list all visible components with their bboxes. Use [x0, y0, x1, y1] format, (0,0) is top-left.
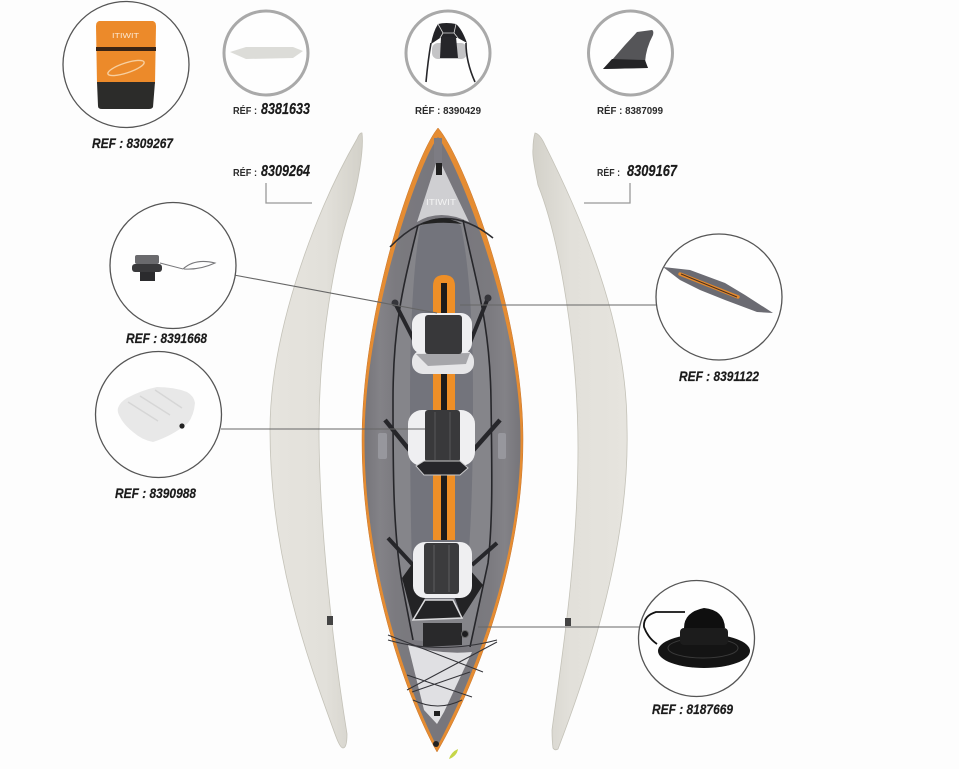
cushion body — [118, 387, 195, 442]
left side tube — [270, 133, 362, 748]
label: right tube — [597, 163, 678, 180]
valve flange — [132, 264, 162, 272]
hull outer rim — [362, 128, 523, 752]
label: fin: RÉF : 8387099 — [597, 104, 663, 117]
label: left tube: RÉF : — [233, 166, 257, 179]
part: cushion — [96, 352, 222, 478]
leader: inflation valve — [234, 275, 437, 313]
seat 2 straps — [385, 420, 500, 463]
fin ring — [588, 11, 672, 95]
cockpit inner band — [393, 219, 492, 647]
valve ring — [110, 202, 236, 328]
rear valve — [462, 630, 468, 638]
seat 2 pad — [425, 410, 460, 462]
backpack mesh pocket — [97, 82, 155, 109]
black centre strip — [441, 283, 447, 540]
label: left tube — [233, 163, 310, 180]
drain cap base — [680, 628, 728, 645]
part: inflation valve — [110, 202, 236, 328]
part: kayak skin — [224, 11, 308, 95]
part: backpack — [63, 2, 189, 128]
leader: floor — [460, 304, 656, 306]
backpack orange body — [96, 21, 156, 84]
right side tube — [533, 133, 627, 750]
label: right tube: RÉF : — [597, 166, 620, 179]
part: floor — [656, 234, 782, 360]
seat back — [431, 23, 467, 44]
seat 3 — [388, 538, 497, 647]
bungee cords — [388, 635, 497, 706]
leader: drain valve — [478, 626, 640, 628]
left seam — [393, 225, 418, 640]
bow tab — [436, 163, 442, 175]
bow strap — [434, 138, 442, 164]
cushion ribs — [128, 390, 182, 421]
skin ring — [224, 11, 308, 95]
rear footwell — [423, 623, 462, 647]
part: seat — [406, 11, 490, 95]
orange floor strip — [433, 275, 455, 540]
label: seat: RÉF : 8390429 — [415, 104, 481, 117]
cockpit rim hump — [420, 218, 462, 225]
bracket: left tube — [266, 183, 312, 203]
seat 2 handles — [378, 433, 506, 459]
drain flange highlight — [668, 638, 738, 658]
seat ring — [406, 11, 490, 95]
seat 2 — [378, 410, 506, 475]
hull body — [364, 137, 520, 747]
cushion ring — [96, 352, 222, 478]
cushion valve — [179, 423, 185, 429]
seat 3 base — [413, 600, 462, 620]
seat 1 — [392, 294, 492, 374]
kayak — [362, 128, 523, 752]
seat back seams — [438, 24, 458, 38]
label: floor: REF : 8391122 — [679, 368, 759, 384]
label: drain valve: REF : 8187669 — [652, 701, 733, 717]
seat 1 pad — [425, 315, 462, 354]
seat 3 pad — [424, 543, 459, 594]
seat 1 base inner — [416, 353, 470, 366]
seat straps — [426, 43, 475, 82]
backpack strap — [96, 47, 156, 51]
floor orange strip — [680, 274, 738, 297]
seat 1 straps — [395, 298, 488, 355]
leader: cushion — [221, 428, 425, 430]
backpack ring — [63, 2, 189, 128]
seat 1 clips — [392, 294, 492, 306]
label: left tube: 8309264 — [261, 163, 310, 180]
seat 1 base — [412, 350, 474, 374]
skin shape — [230, 47, 303, 59]
bracket: right tube — [584, 183, 630, 203]
brand on deck: ITIWIT — [426, 198, 456, 207]
floor dark centre — [681, 274, 737, 297]
label: cushion: REF : 8390988 — [115, 485, 196, 501]
label: skin: 8381633 — [261, 101, 310, 118]
seat 3 side panels — [402, 560, 483, 620]
seat 1 back — [412, 313, 472, 354]
seat pad — [440, 37, 458, 58]
part: fin — [588, 11, 672, 95]
backpack brand: ITIWIT — [112, 33, 140, 40]
fin blade — [603, 30, 653, 69]
stern ring — [433, 741, 439, 747]
stern deck panel — [408, 645, 472, 724]
tube fittings — [327, 616, 571, 626]
drain cap top — [684, 608, 725, 628]
cockpit arch — [390, 219, 493, 247]
seat 2 base — [416, 461, 468, 475]
label: right tube: 8309167 — [627, 163, 678, 180]
valve cord — [160, 261, 215, 269]
seat 3 straps — [388, 538, 497, 565]
cockpit floor — [410, 220, 473, 610]
seat 2 ribs — [435, 412, 450, 460]
backpack kayak sketch — [106, 57, 146, 79]
seat 3 back — [413, 542, 472, 598]
floor panel — [663, 267, 773, 313]
label: skin: RÉF : — [233, 104, 257, 117]
stern tab — [434, 711, 440, 716]
part: drain valve — [638, 580, 754, 696]
paddle tip — [449, 749, 458, 759]
label: skin — [233, 101, 310, 118]
valve top — [135, 255, 159, 264]
seat 2 back — [408, 410, 475, 466]
valve stem — [140, 272, 155, 281]
drain flange — [658, 634, 750, 668]
right seam — [463, 220, 492, 647]
fin base — [603, 59, 648, 69]
drain cord — [644, 612, 685, 644]
bow deck panel — [417, 157, 469, 222]
seat base — [432, 43, 467, 59]
label: valve: REF : 8391668 — [126, 330, 207, 346]
drain ring — [638, 580, 754, 696]
label: backpack: REF : 8309267 — [92, 135, 174, 151]
seat 3 ribs — [434, 545, 449, 592]
floor ring — [656, 234, 782, 360]
